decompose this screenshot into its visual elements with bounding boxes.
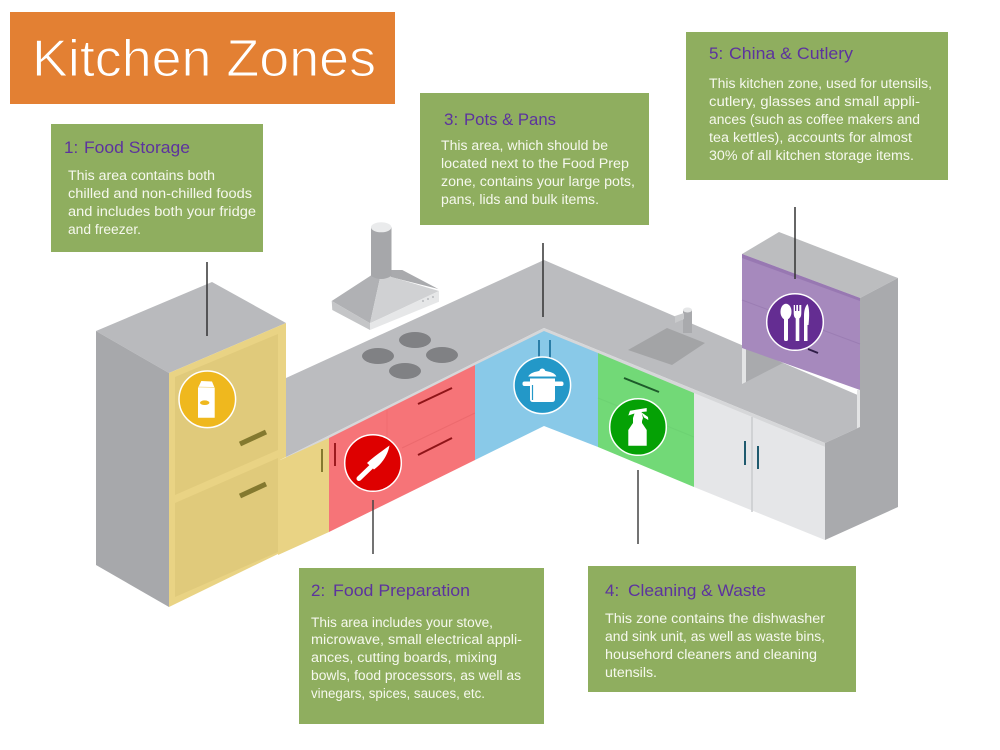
tall cabinet: zone 5 bbox=[742, 232, 898, 540]
panel: 2 food preparation: Food Preparation bbox=[333, 581, 470, 600]
panel: 2 food preparation: 2: bbox=[311, 581, 325, 600]
panel: 5 china and cutlery: cutlery, glasses and small appli- bbox=[709, 94, 920, 109]
icon: milk carton bbox=[179, 371, 236, 428]
panel: 4 cleaning and waste bbox=[588, 566, 856, 692]
icon: spray bottle bbox=[610, 399, 666, 455]
panel: 2 food preparation: ances, cutting boards, mixing bbox=[311, 650, 497, 665]
panel: 5 china and cutlery: 30% of all kitchen storage items. bbox=[709, 148, 914, 163]
leader line 5 bbox=[794, 207, 796, 279]
panel: 5 china and cutlery bbox=[686, 32, 948, 180]
icon: chef knife bbox=[345, 435, 401, 491]
panel: 3 pots and pans: located next to the Food Prep bbox=[441, 156, 629, 171]
counter top bbox=[286, 260, 860, 461]
panel: 5 china and cutlery: China & Cutlery bbox=[729, 44, 854, 63]
leader line 2 bbox=[372, 500, 374, 554]
white cabinets bbox=[694, 393, 825, 540]
panel: 5 china and cutlery: This kitchen zone, used for utensils, bbox=[709, 76, 932, 91]
panel: 5 china and cutlery: tea kettles), accounts for almost bbox=[709, 130, 912, 145]
extractor hood bbox=[332, 222, 439, 330]
panel: 3 pots and pans: Pots & Pans bbox=[464, 110, 556, 129]
panel: 2 food preparation: bowls, food processors, as well as bbox=[311, 668, 521, 683]
green cabinets: zone 4 bbox=[598, 353, 694, 487]
panel: 2 food preparation: This area includes your stove, bbox=[311, 615, 493, 630]
blue corner cabinet: zone 3 bbox=[475, 331, 598, 460]
leader line 3 bbox=[542, 243, 544, 317]
panel: 1 food storage: 1: bbox=[64, 138, 78, 157]
panel: 3 pots and pans bbox=[420, 93, 649, 225]
panel: 5 china and cutlery: 5: bbox=[709, 44, 723, 63]
panel: 4 cleaning and waste: Cleaning & Waste bbox=[628, 581, 766, 600]
low yellow cabinet bbox=[278, 438, 329, 555]
panel: 3 pots and pans: zone, contains your large pots, bbox=[441, 174, 635, 189]
panel: 4 cleaning and waste: This zone contains the dishwasher bbox=[605, 611, 826, 626]
panel: 3 pots and pans: 3: bbox=[444, 110, 458, 129]
panel: 2 food preparation: vinegars, spices, sauces, etc. bbox=[311, 686, 485, 701]
panel: 1 food storage: This area contains both bbox=[68, 168, 215, 183]
stove burners bbox=[362, 332, 458, 379]
title bbox=[10, 12, 395, 104]
panel: 2 food preparation bbox=[299, 568, 544, 724]
leader line 4 bbox=[637, 470, 639, 544]
panel: 1 food storage: and includes both your fridge bbox=[68, 204, 256, 219]
panel: 4 cleaning and waste: utensils. bbox=[605, 665, 657, 680]
sink and tap bbox=[628, 308, 705, 365]
leader line 1 bbox=[206, 262, 208, 336]
panel: 5 china and cutlery: ances (such as coffee makers and bbox=[709, 112, 920, 127]
panel: 1 food storage: Food Storage bbox=[84, 138, 190, 157]
panel: 1 food storage: chilled and non-chilled foods bbox=[68, 186, 252, 201]
panel: 3 pots and pans: pans, lids and bulk items. bbox=[441, 192, 599, 207]
panel: 3 pots and pans: This area, which should be bbox=[441, 138, 608, 153]
panel: 4 cleaning and waste: 4: bbox=[605, 581, 619, 600]
panel: 1 food storage: and freezer. bbox=[68, 222, 141, 237]
icon: cutlery bbox=[767, 294, 823, 350]
fridge: zone 1 bbox=[96, 282, 286, 607]
title: Kitchen Zones bbox=[32, 30, 376, 88]
panel: 1 food storage bbox=[51, 124, 263, 252]
red cabinets: zone 2 bbox=[329, 365, 475, 532]
panel: 4 cleaning and waste: and sink unit, as well as waste bins, bbox=[605, 629, 825, 644]
icon: cooking pot bbox=[514, 357, 571, 414]
panel: 4 cleaning and waste: househord cleaners and cleaning bbox=[605, 647, 817, 662]
panel: 2 food preparation: microwave, small electrical appli- bbox=[311, 632, 522, 647]
